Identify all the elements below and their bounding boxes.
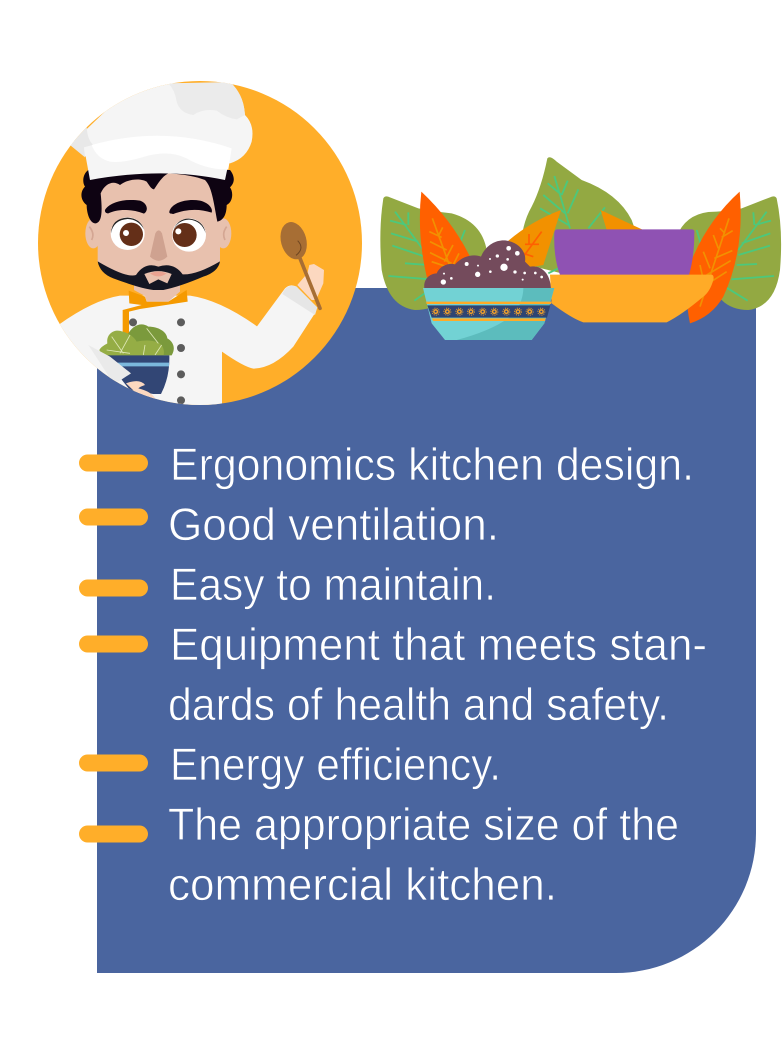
right hand (297, 264, 324, 300)
bullet markers (79, 454, 148, 842)
jacket (58, 285, 316, 407)
chef figure (58, 82, 324, 407)
hat band highlight (92, 136, 232, 169)
checklist text (168, 439, 707, 910)
sleeve cuff (282, 286, 317, 315)
left orange leaf (420, 192, 470, 283)
spoon head (280, 222, 307, 260)
right orange leaf (687, 192, 741, 323)
food mound (424, 240, 551, 288)
centre orange leaves (498, 210, 643, 270)
checklist text: The appropriate size of the (168, 799, 679, 850)
illustration: chef in orange circle (38, 81, 362, 407)
hat shading left (70, 127, 93, 157)
infographic (38, 81, 782, 973)
nose (150, 230, 167, 261)
hat shading top (168, 82, 245, 119)
bowl (105, 355, 169, 394)
teal bowl (423, 288, 554, 340)
ears (85, 218, 231, 248)
eyebrows (105, 200, 212, 214)
mouth area (144, 271, 172, 284)
purple bowl (554, 229, 694, 275)
left green leaf (380, 196, 487, 310)
hair (81, 170, 234, 223)
checklist text: Good ventilation. (168, 499, 499, 550)
buttons (129, 318, 185, 404)
checklist text: Equipment that meets stan- (170, 619, 707, 670)
ear detail (89, 227, 227, 240)
orange circle (38, 81, 362, 405)
left sleeve (88, 345, 131, 382)
lips (150, 272, 167, 276)
panel: blue content card (97, 288, 756, 973)
checklist text: Easy to maintain. (170, 559, 496, 610)
neck (134, 283, 180, 302)
spoon handle (299, 257, 320, 308)
face (98, 174, 220, 276)
eyes (111, 217, 206, 252)
amber bowl (550, 275, 714, 322)
right green leaf (677, 196, 781, 310)
checklist text: Ergonomics kitchen design. (170, 439, 694, 490)
left hand (126, 381, 155, 400)
checklist text: commercial kitchen. (168, 859, 557, 910)
hat band (86, 156, 228, 180)
checklist text: Energy efficiency. (170, 739, 501, 790)
checklist text: dards of health and safety. (168, 679, 669, 730)
centre green leaf (521, 157, 636, 273)
beard (98, 261, 220, 290)
flower pattern (432, 308, 545, 315)
collar trim (123, 290, 188, 335)
salad (99, 324, 174, 356)
illustration: food bowls and leaves (380, 157, 781, 340)
hat puff (70, 83, 252, 163)
